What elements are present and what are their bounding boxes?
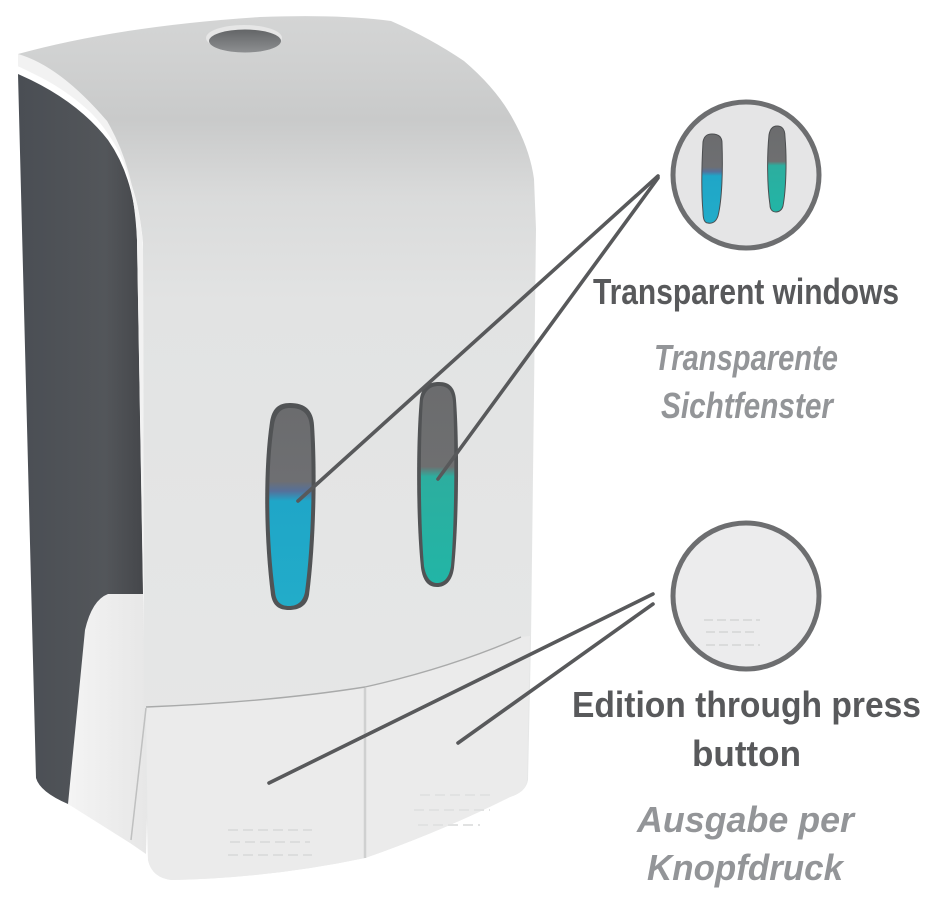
heading: edition through press button <box>572 684 921 774</box>
right window <box>417 382 458 587</box>
subheading: Transparente Sichtfenster <box>654 337 838 426</box>
main white body <box>18 16 536 880</box>
side bracket <box>68 594 150 854</box>
dark rear housing <box>18 74 143 815</box>
subheading: Transparente Sichtfenster: Transparente <box>654 337 838 378</box>
cover highlight edge <box>18 54 144 640</box>
pointer lines: press button <box>269 594 653 783</box>
dispenser illustration <box>18 16 536 880</box>
heading: edition through press button: button <box>692 733 801 774</box>
pointer lines: transparent windows <box>298 176 658 501</box>
detail circle: button <box>673 523 819 669</box>
press buttons <box>131 636 530 880</box>
left window <box>265 403 316 610</box>
detail circle: windows <box>673 102 819 248</box>
subheading: Ausgabe per Knopfdruck <box>636 799 856 888</box>
dispensing hole <box>206 25 282 52</box>
subheading: Ausgabe per Knopfdruck: Knopfdruck <box>647 847 845 888</box>
subheading: Transparente Sichtfenster: Sichtfenster <box>661 385 835 426</box>
subheading: Ausgabe per Knopfdruck: Ausgabe per <box>636 799 856 840</box>
